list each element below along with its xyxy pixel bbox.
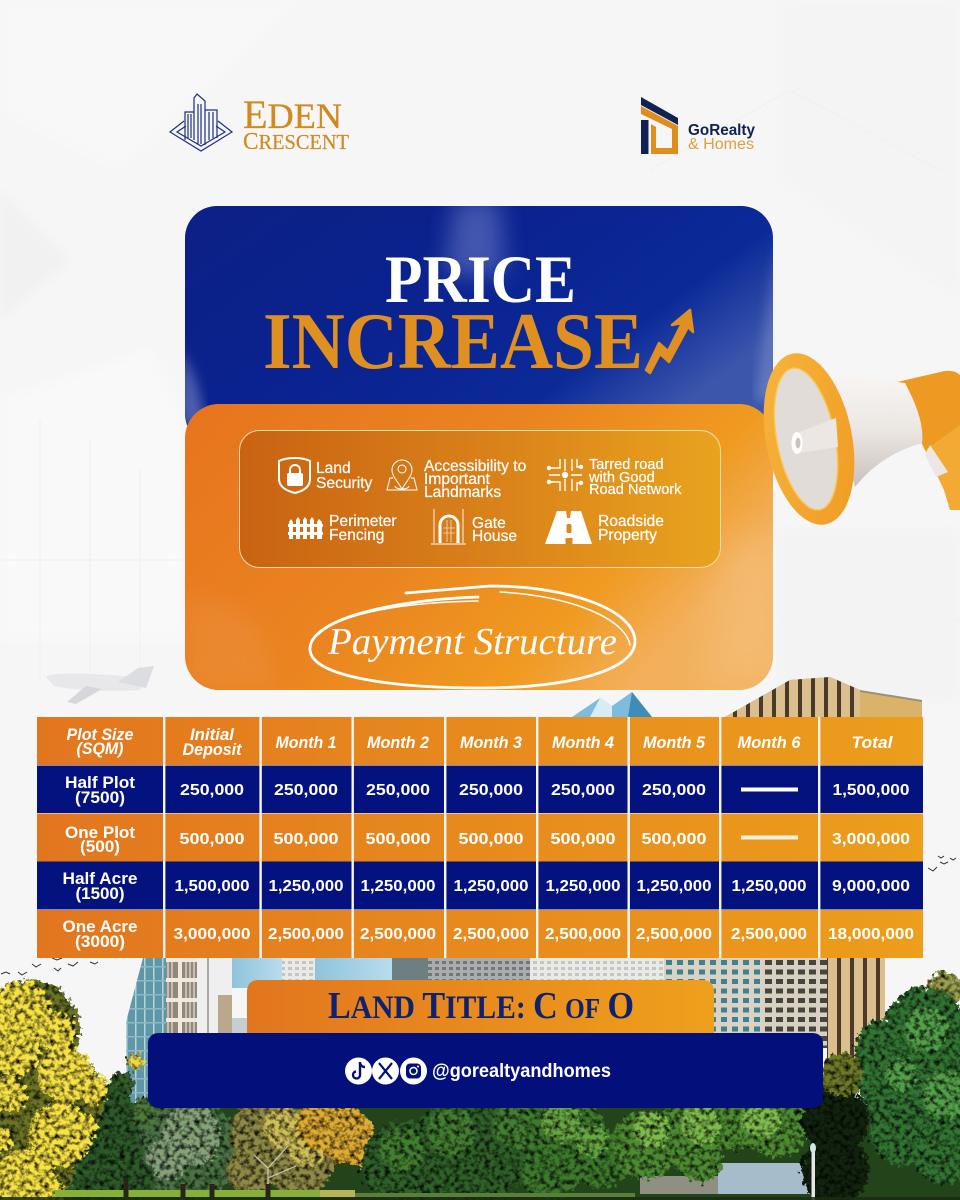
branches bbox=[254, 1146, 296, 1184]
skyline buildings bbox=[126, 677, 922, 1140]
row: One Acre bbox=[62, 918, 914, 951]
megaphone bbox=[750, 345, 960, 533]
row: Half Acre: 1,250,000 bbox=[732, 878, 807, 895]
building: left glass tower bbox=[126, 958, 197, 1108]
table header: Initial bbox=[190, 726, 234, 744]
row: One Plot: 500,000 bbox=[366, 831, 431, 848]
tree: dark left bbox=[51, 1086, 154, 1200]
table header: (SQM) bbox=[76, 740, 124, 758]
row: Half Acre: 9,000,000 bbox=[832, 878, 910, 895]
icon: house bbox=[641, 97, 678, 154]
text: Land Security: Security bbox=[316, 475, 373, 492]
row: One Acre: 2,500,000 bbox=[360, 926, 436, 943]
logo: GoRealty & Homes bbox=[641, 97, 755, 154]
heading: PRICE: PRICE bbox=[385, 241, 576, 317]
table header: Month 5 bbox=[643, 734, 706, 752]
row: One Acre: 2,500,000 bbox=[731, 926, 807, 943]
building: tower behind table bbox=[725, 677, 922, 717]
text: Roadside Property: Property bbox=[598, 527, 657, 544]
row: Half Plot: 250,000 bbox=[642, 782, 706, 799]
text: Roadside Property: Roadside bbox=[598, 513, 664, 530]
building: cream tower with windows bbox=[664, 958, 828, 1048]
table header: Month 2 bbox=[367, 734, 429, 752]
driver bbox=[797, 418, 838, 453]
row: Half Acre bbox=[62, 870, 910, 903]
row: One Acre: One Acre bbox=[62, 918, 138, 936]
table header: Month 6 bbox=[738, 734, 801, 752]
palm small bbox=[128, 1054, 144, 1070]
row: One Plot bbox=[65, 824, 910, 856]
row: One Acre: 18,000,000 bbox=[828, 926, 914, 943]
icon: road network bbox=[548, 459, 582, 491]
row: Half Acre: 1,500,000 bbox=[174, 878, 250, 895]
text: Tarred road: with Good bbox=[588, 470, 655, 486]
table header bbox=[66, 726, 893, 759]
text: Perimeter Fencing: Fencing bbox=[329, 527, 384, 544]
text: Tarred road: Tarred road bbox=[589, 457, 664, 473]
trigger bbox=[925, 445, 948, 477]
tree: far right green bbox=[908, 972, 960, 1012]
row: One Plot: 3,000,000 bbox=[832, 831, 910, 848]
lamp post bbox=[812, 1150, 815, 1200]
row: One Acre: 2,500,000 bbox=[545, 926, 621, 943]
table header: Total bbox=[852, 734, 893, 752]
row: Half Plot: 1,500,000 bbox=[832, 782, 910, 799]
row: One Acre: 2,500,000 bbox=[268, 926, 344, 943]
handle bbox=[893, 371, 960, 510]
row: One Plot: (500) bbox=[80, 838, 120, 856]
building: low white block bbox=[369, 1106, 443, 1140]
row: Half Plot: 250,000 bbox=[274, 782, 338, 799]
text: handle: @gorealtyandhomes bbox=[432, 1061, 611, 1082]
row: Half Acre: 1,250,000 bbox=[454, 878, 529, 895]
building: glass tip behind table bbox=[572, 692, 652, 717]
text: Land Security: Land bbox=[316, 460, 351, 477]
text: Tarred road: Road Network bbox=[589, 482, 682, 498]
lawn bbox=[55, 1190, 325, 1197]
icon: X bbox=[372, 1058, 399, 1084]
row: One Acre: (3000) bbox=[75, 933, 125, 951]
row: Half Plot: 250,000 bbox=[551, 782, 615, 799]
row: Half Plot: 250,000 bbox=[180, 782, 244, 799]
icon: shield lock bbox=[279, 458, 310, 493]
row: Half Acre: 1,250,000 bbox=[636, 878, 712, 895]
row: One Acre: 2,500,000 bbox=[636, 926, 712, 943]
text: & Homes: & Homes bbox=[688, 136, 754, 153]
row: One Plot: 500,000 bbox=[274, 831, 339, 848]
heading: Payment Structure bbox=[310, 586, 635, 688]
table header: Month 4 bbox=[552, 734, 614, 752]
cone bbox=[825, 372, 922, 487]
icon: towers in diamond bbox=[170, 94, 232, 151]
icon: tiktok bbox=[345, 1058, 372, 1084]
heading: Payment Structure: Payment Structure bbox=[327, 621, 617, 663]
row: One Plot: 500,000 bbox=[642, 831, 707, 848]
table header: Month 1 bbox=[276, 734, 336, 752]
row: Half Acre: Half Acre bbox=[62, 870, 138, 888]
inner bell bbox=[764, 363, 848, 515]
row: One Acre: 3,000,000 bbox=[174, 926, 251, 943]
row: Half Plot bbox=[65, 774, 910, 807]
icon: map pin bbox=[387, 460, 417, 490]
text: Accessibility: Important bbox=[424, 471, 491, 488]
banner: land title bbox=[247, 980, 714, 1034]
feature box bbox=[240, 430, 720, 568]
footer: social bar bbox=[148, 1033, 823, 1108]
table: payment structure bbox=[37, 717, 923, 958]
row: Half Plot: 250,000 bbox=[459, 782, 523, 799]
banner: land title: LAND TITLE: C OF O bbox=[328, 985, 634, 1027]
panel: blue price increase bbox=[185, 206, 773, 426]
icon: road bbox=[545, 511, 592, 544]
table header: Deposit bbox=[182, 741, 243, 759]
tree: left big yellow tree bbox=[0, 980, 108, 1200]
text: GoRealty: GoRealty bbox=[688, 122, 755, 139]
trunks bbox=[126, 1178, 268, 1197]
icon: instagram bbox=[400, 1058, 427, 1084]
row: Half Plot: 250,000 bbox=[366, 782, 430, 799]
text: Accessibility: Accessibility to bbox=[424, 458, 526, 475]
table rows bbox=[37, 717, 923, 765]
panel: orange features bbox=[185, 404, 790, 690]
text: Crescent: CRESCENT bbox=[243, 129, 349, 155]
row: Half Acre: 1,250,000 bbox=[268, 878, 344, 895]
table header: Plot Size bbox=[66, 726, 134, 744]
trees bbox=[0, 972, 960, 1200]
icon: fence bbox=[288, 517, 323, 539]
table backing bbox=[37, 717, 923, 958]
row: One Plot: 500,000 bbox=[458, 831, 524, 848]
birds bbox=[1, 856, 956, 975]
airplane bbox=[46, 666, 154, 704]
row: Half Plot: Half Plot bbox=[65, 774, 136, 792]
logo: Eden Crescent bbox=[170, 92, 349, 155]
row: One Acre: 2,500,000 bbox=[453, 926, 529, 943]
text: Gate House: House bbox=[472, 528, 517, 545]
icon: gate house bbox=[431, 509, 466, 544]
text: Perimeter Fencing: Perimeter bbox=[329, 513, 397, 530]
text: Accessibility: Landmarks bbox=[424, 484, 501, 501]
tree: dark right bbox=[801, 1086, 869, 1200]
wall behind trees bbox=[640, 1176, 720, 1194]
row: Half Acre: 1,250,000 bbox=[360, 878, 436, 895]
row: One Plot: 500,000 bbox=[180, 831, 245, 848]
blue wall bbox=[718, 1163, 810, 1194]
palm bbox=[820, 1053, 864, 1097]
row: One Plot: One Plot bbox=[65, 824, 136, 842]
text: Gate House: Gate bbox=[472, 515, 506, 532]
icon: rising arrow bbox=[646, 310, 693, 373]
table header: Month 3 bbox=[460, 734, 522, 752]
heading: INCREASE: INCREASE bbox=[263, 298, 643, 386]
row: One Plot: 500,000 bbox=[550, 831, 616, 848]
text: Eden: EDEN bbox=[243, 92, 342, 137]
row: Half Plot: (7500) bbox=[75, 789, 125, 807]
row: Half Acre: (1500) bbox=[76, 885, 124, 903]
row: Half Acre: 1,250,000 bbox=[546, 878, 621, 895]
building: tan stripe tower bbox=[827, 958, 885, 1058]
ring bbox=[750, 345, 868, 533]
